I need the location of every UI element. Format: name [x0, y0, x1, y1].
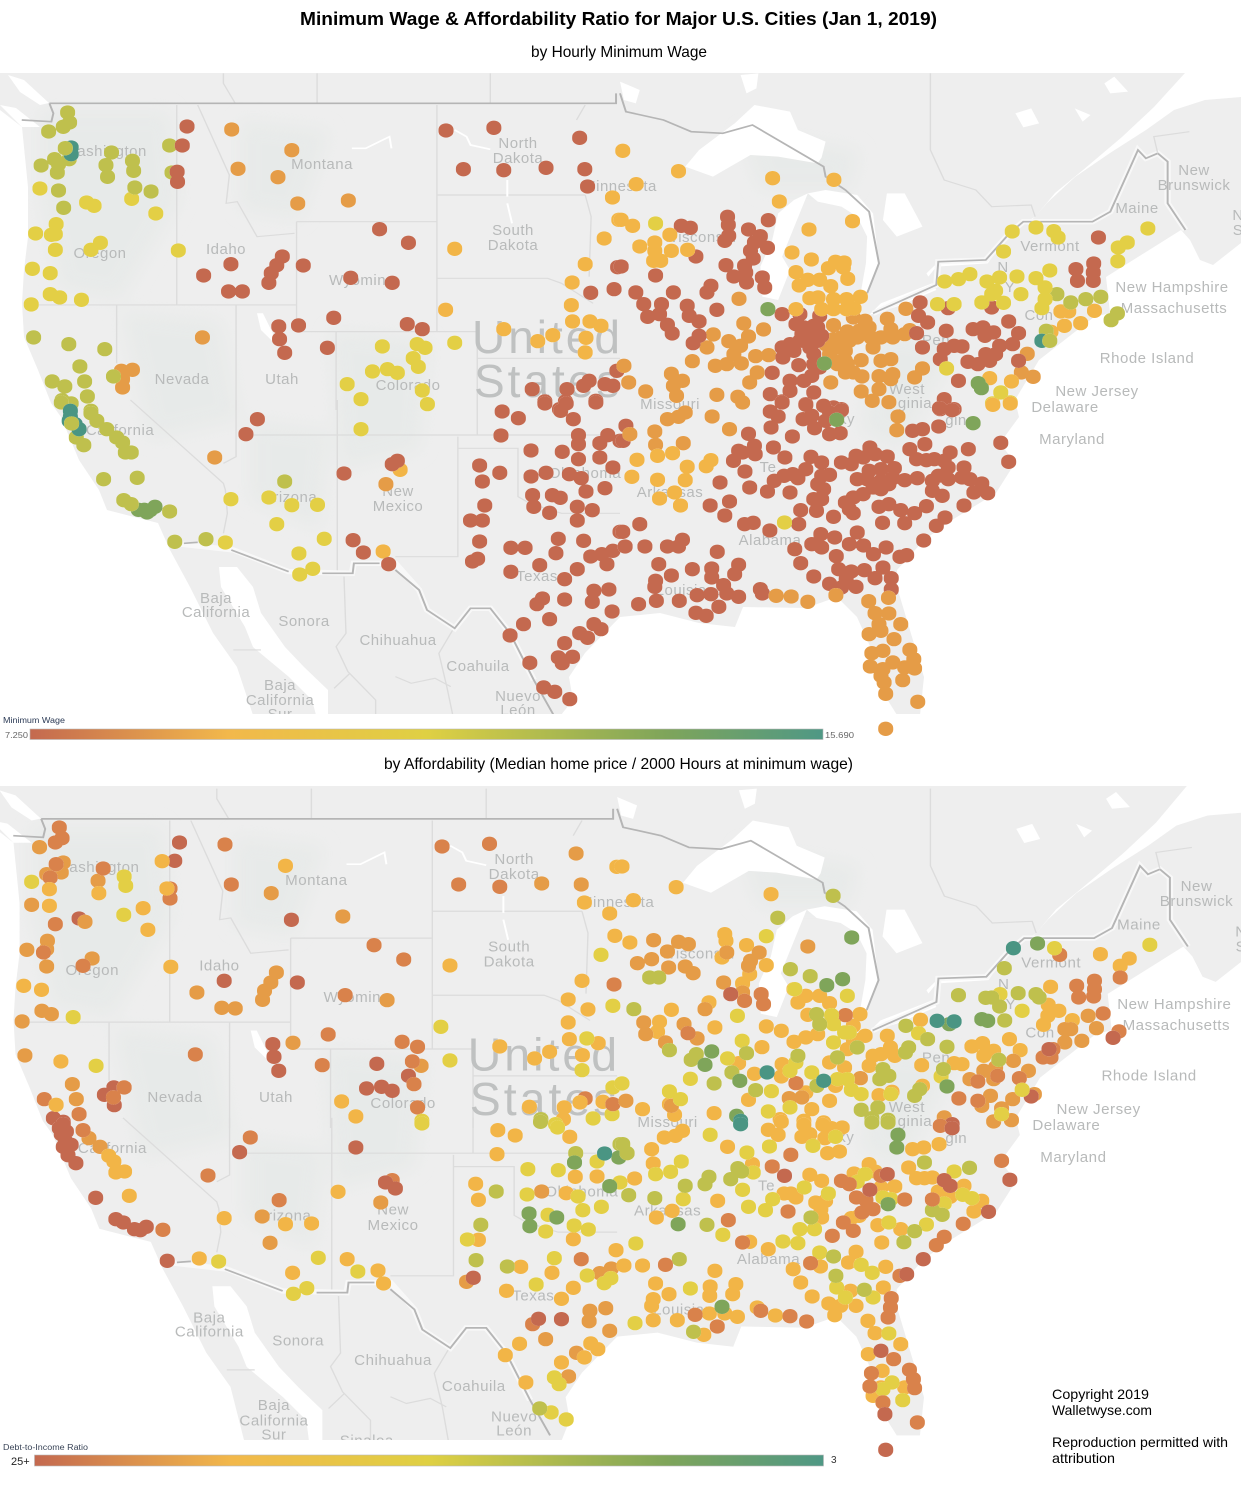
- map text labels: [63, 135, 1241, 723]
- map panel: minimum wage: [0, 73, 1241, 730]
- map text labels: West: [889, 381, 925, 398]
- map text labels: Idaho: [199, 958, 240, 975]
- map text labels: Pen: [922, 332, 950, 349]
- map text labels: N: [997, 259, 1009, 276]
- map text labels: New Hampshire: [1117, 996, 1231, 1013]
- map text labels: Con: [1025, 1024, 1055, 1041]
- map text labels: N: [998, 976, 1009, 993]
- map text labels: Minnesota: [580, 894, 654, 911]
- map text labels: Te: [760, 459, 776, 476]
- map text labels: Sur: [268, 706, 292, 723]
- map text labels: ginia: [898, 1113, 932, 1130]
- map text labels: California: [246, 692, 314, 709]
- map text labels: North: [498, 135, 538, 152]
- map text labels: Alabama: [737, 1251, 800, 1268]
- map text labels: Colorado: [370, 1095, 436, 1112]
- map text labels: Arkansas: [634, 1203, 701, 1220]
- map text labels: Wyoming: [329, 272, 395, 289]
- map text labels: Maine: [1117, 916, 1161, 933]
- city dots: minimum wage, south-west: [61, 402, 620, 700]
- map text labels: States: [474, 355, 622, 407]
- legend title: Debt-to-Income Ratio: [3, 1443, 89, 1452]
- map text labels: Y: [1005, 279, 1015, 296]
- map text labels: New: [1181, 878, 1212, 895]
- dot outside the map: Key West, minimum wage: [867, 728, 905, 730]
- copyright note: Reproduction permitted with: [1052, 1434, 1228, 1450]
- map text labels: Idaho: [206, 241, 246, 258]
- map text labels: West: [889, 1099, 925, 1116]
- map text labels: New Hampshire: [1115, 279, 1229, 296]
- map text labels: United: [468, 1029, 620, 1081]
- map text labels: Washington: [55, 859, 139, 876]
- map text labels: California: [78, 1140, 147, 1157]
- map text labels: Nuevo: [491, 1408, 537, 1425]
- city dots: affordability, south-east: [623, 1121, 1010, 1423]
- map text labels: California: [239, 1412, 309, 1429]
- map text labels: New: [377, 1202, 409, 1219]
- map text labels: Mexico: [368, 1217, 419, 1234]
- map text labels: New Jersey: [1057, 1101, 1141, 1118]
- map text labels: Delaware: [1031, 399, 1099, 416]
- map text labels: Arizona: [257, 1208, 312, 1225]
- map text labels: Massachusetts: [1121, 300, 1227, 317]
- map text labels: Oregon: [73, 245, 127, 262]
- map text labels: Texas: [512, 1287, 554, 1304]
- map text labels: [55, 851, 1241, 1449]
- city dots: affordability, north-west: [22, 827, 617, 1125]
- city dots: minimum wage, north-west: [31, 112, 619, 412]
- map text labels: Te: [758, 1177, 775, 1194]
- map text labels: Baja: [200, 590, 232, 607]
- map text labels: Louisiana: [653, 1301, 723, 1318]
- map text labels: Alabama: [739, 532, 802, 549]
- map text labels: ky: [838, 1129, 854, 1146]
- map text labels: Utah: [265, 371, 299, 388]
- legend min value: 7.250: [5, 731, 29, 740]
- map text labels: Wisconsin: [664, 229, 736, 246]
- map text labels: Maryland: [1039, 431, 1105, 448]
- map text labels: Sur: [261, 1426, 286, 1443]
- copyright note: [1052, 1386, 1228, 1466]
- map text labels: Sonora: [278, 613, 330, 630]
- copyright note: Copyright 2019: [1052, 1386, 1149, 1402]
- map text labels: Rhode Island: [1101, 1068, 1197, 1085]
- map text labels: Chihuahua: [354, 1352, 432, 1369]
- map text labels: Montana: [285, 872, 348, 889]
- map text labels: Colorado: [376, 377, 440, 394]
- map text labels: Con: [1024, 307, 1054, 324]
- legend right value: 3: [831, 1455, 837, 1466]
- map text labels: Missouri: [640, 396, 700, 413]
- map text labels: Baja: [264, 677, 296, 694]
- map text labels: Chihuahua: [359, 632, 437, 649]
- legend title: Minimum Wage: [3, 716, 66, 725]
- map text labels: gin: [945, 1130, 967, 1147]
- map text labels: Nevada: [155, 371, 210, 388]
- map text labels: Maryland: [1040, 1149, 1107, 1166]
- city dots: minimum wage, north-east: [621, 150, 1148, 410]
- legend left value: 25+: [11, 1456, 30, 1468]
- map text labels: Washington: [63, 143, 147, 160]
- map text labels: Sinaloa: [340, 1433, 394, 1449]
- map text labels: South: [492, 222, 534, 239]
- map text labels: Dakota: [484, 954, 535, 971]
- subtitle: hourly minimum wage map: by Hourly Minimum Wage: [531, 44, 707, 61]
- map text labels: California: [175, 1324, 244, 1341]
- map text labels: Dakota: [493, 150, 543, 167]
- legend: minimum wage: [3, 716, 855, 740]
- map text labels: Oklahoma: [549, 465, 621, 482]
- map text labels: Y: [1005, 996, 1016, 1013]
- map text labels: Louisiana: [656, 582, 725, 599]
- map text labels: United: [472, 311, 623, 363]
- map text labels: North: [494, 851, 534, 868]
- map text labels: Minnesota: [583, 178, 657, 195]
- map text labels: California: [86, 422, 154, 439]
- map text labels: Massachusetts: [1123, 1017, 1230, 1034]
- map text labels: Coahuila: [442, 1378, 506, 1395]
- map text labels: Utah: [259, 1089, 293, 1106]
- base map: minimum wage: [0, 73, 1241, 723]
- map text labels: Delaware: [1032, 1117, 1100, 1134]
- map text labels: Dakota: [489, 866, 540, 883]
- map panel: affordability: [0, 785, 1241, 1451]
- map text labels: Brunswick: [1160, 893, 1233, 910]
- map text labels: Sonora: [272, 1333, 324, 1350]
- map text labels: Arkansas: [637, 484, 703, 501]
- map text labels: Brunswick: [1158, 177, 1230, 194]
- map text labels: Baja: [258, 1397, 290, 1414]
- map text labels: Dakota: [488, 237, 538, 254]
- map text labels: New: [1178, 162, 1210, 179]
- subtitle: affordability map: by Affordability (Median home price / 2000 Hours at minimum wage): [384, 756, 853, 773]
- base map: affordability: [0, 785, 1241, 1451]
- legend colour ramp: [30, 729, 823, 740]
- copyright note: Walletwyse.com: [1052, 1402, 1152, 1418]
- map text labels: Oregon: [65, 962, 119, 979]
- map text labels: Wisconsin: [661, 946, 735, 963]
- map text labels: South: [488, 939, 530, 956]
- map text labels: Pen: [922, 1049, 950, 1066]
- copyright note: attribution: [1052, 1450, 1115, 1466]
- map text labels: Montana: [291, 156, 353, 173]
- map text labels: Baja: [193, 1310, 226, 1327]
- map text labels: Rhode Island: [1100, 350, 1194, 367]
- map text labels: gin: [945, 412, 967, 429]
- map text labels: California: [182, 604, 250, 621]
- map text labels: León: [496, 1422, 532, 1439]
- map text labels: New: [382, 483, 414, 500]
- city dots: minimum wage, south-east: [623, 402, 1010, 730]
- map text labels: States: [470, 1073, 620, 1125]
- title: Minimum Wage & Affordability Ratio for Major U.S. Cities (Jan 1, 2019): [300, 9, 937, 29]
- map text labels: Maine: [1115, 200, 1159, 217]
- legend max value: 15.690: [825, 731, 855, 740]
- map text labels: Vermont: [1020, 238, 1080, 255]
- legend colour ramp: [34, 1455, 824, 1466]
- map text labels: Missouri: [637, 1114, 698, 1131]
- map text labels: Oklahoma: [545, 1184, 618, 1201]
- map text labels: Arizona: [263, 489, 317, 506]
- map text labels: Texas: [516, 568, 558, 585]
- map text labels: Wyoming: [323, 989, 390, 1006]
- map text labels: ginia: [898, 395, 932, 412]
- map text labels: León: [500, 702, 536, 719]
- map text labels: Coahuila: [446, 658, 510, 675]
- map text labels: New Jersey: [1055, 383, 1139, 400]
- legend: debt-to-income ratio: [3, 1443, 837, 1468]
- map text labels: Nevada: [147, 1089, 203, 1106]
- city dots: affordability, south-west: [59, 1121, 620, 1420]
- map text labels: Vermont: [1021, 955, 1081, 972]
- dot outside the map: Key West, affordability: [867, 1449, 905, 1451]
- city dots: affordability, north-east: [622, 866, 1150, 1125]
- map text labels: ky: [839, 411, 855, 428]
- map text labels: Mexico: [373, 498, 423, 515]
- map text labels: Nuevo: [495, 688, 541, 705]
